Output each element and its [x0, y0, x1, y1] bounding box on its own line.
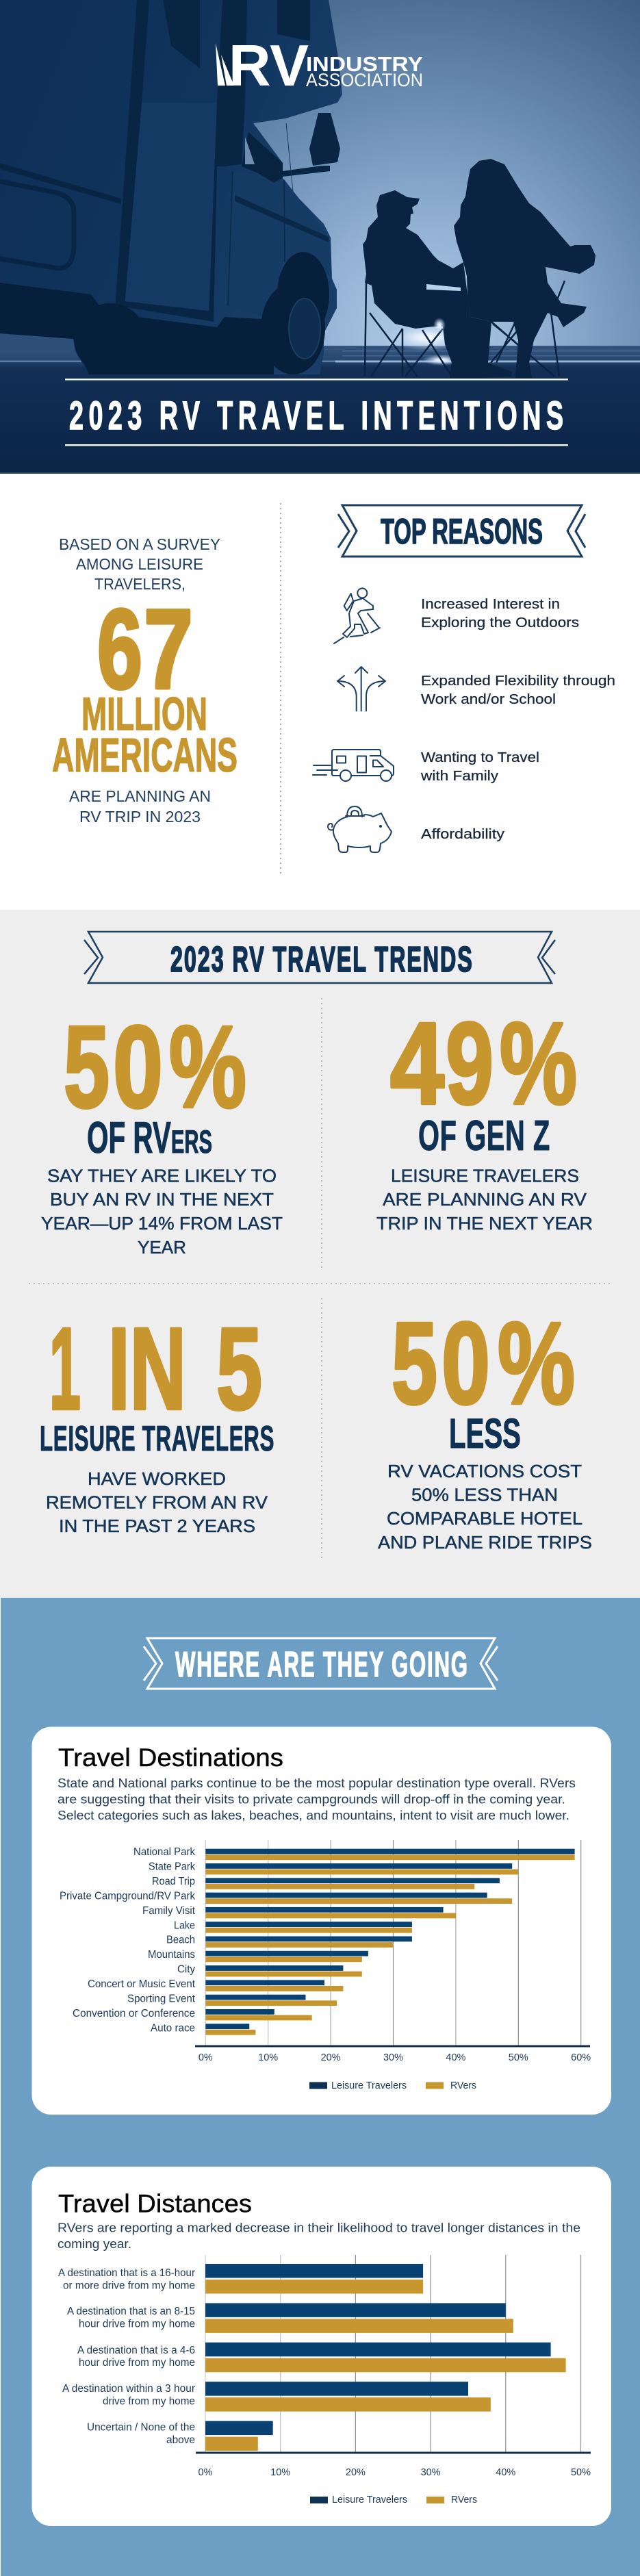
banner: travel trends: 2023 RV TRAVEL TRENDS — [170, 940, 472, 980]
icon: RV — [313, 750, 394, 781]
bar chart: travel distances: A destination that is a 4-6 — [77, 2345, 195, 2356]
big stat: 67 million Americans — [52, 586, 238, 782]
bar chart: travel distances: 40% — [496, 2467, 515, 2478]
card: travel destinations — [31, 1726, 611, 2115]
bar chart: travel distances: 20% — [346, 2467, 366, 2478]
bar chart: travel destinations — [60, 1840, 591, 2063]
reason: family: Wanting to Travel — [421, 750, 539, 765]
survey closing text: RV TRIP IN 2023 — [79, 808, 201, 826]
reason: flexibility: Work and/or School — [421, 692, 556, 707]
survey lead-in text: BASED ON A SURVEY — [59, 535, 220, 553]
bar chart: travel distances: 30% — [421, 2467, 441, 2478]
bar chart: travel distances: 10% — [270, 2467, 290, 2478]
bar chart: travel destinations: 60% — [571, 2052, 591, 2063]
reason: family: with Family — [420, 769, 498, 784]
icon: hiker — [334, 588, 380, 643]
stat: 1 in 5 leisure travelers: REMOTELY FROM AN RV — [46, 1492, 268, 1513]
stat: 50% of RVers: BUY AN RV IN THE NEXT — [50, 1189, 274, 1210]
legend: travel distances: Leisure Travelers — [332, 2494, 407, 2505]
bar chart: travel destinations: Private Campground/RV Park — [60, 1890, 195, 1902]
logo: RV Industry Association: INDUSTRY — [306, 52, 423, 76]
bar chart: travel destinations: National Park — [133, 1846, 195, 1858]
description: travel destinations: State and National parks continue to be the most popular destination type overall. RVers — [57, 1776, 576, 1790]
stat: 50% of RVers: 5 — [64, 1002, 110, 1132]
bar chart: travel destinations: Concert or Music Event — [88, 1978, 196, 1990]
survey lead-in text: AMONG LEISURE — [76, 555, 203, 573]
description: travel destinations: Select categories such as lakes, beaches, and mountains, intent to visit are much lower. — [57, 1808, 569, 1822]
survey lead-in text: TRAVELERS, — [94, 575, 185, 593]
stat: 50% less: % — [498, 1299, 575, 1429]
stat: 49% of Gen Z — [376, 999, 593, 1234]
reason: family — [420, 750, 539, 784]
stat: 1 in 5 leisure travelers: IN — [108, 1304, 186, 1434]
panel: 2023 RV travel trends — [0, 910, 640, 1598]
big stat: 67 million Americans: 7 — [144, 586, 193, 712]
legend: travel destinations: Leisure Travelers — [331, 2080, 407, 2091]
bar chart: travel destinations: 50% — [509, 2052, 528, 2063]
bar chart: travel destinations: Beach — [166, 1935, 195, 1946]
stat: 49% of Gen Z: % — [500, 999, 577, 1129]
legend: travel distances: RVers — [451, 2494, 477, 2505]
stat: 1 in 5 leisure travelers — [40, 1304, 274, 1536]
panel: survey and top reasons — [52, 503, 615, 875]
bar chart: travel distances: A destination within a 3 hour — [62, 2383, 195, 2395]
bar chart: travel destinations: State Park — [149, 1861, 195, 1873]
survey closing text: ARE PLANNING AN — [69, 787, 211, 805]
reason: flexibility — [421, 674, 615, 707]
bar chart: travel destinations: 10% — [258, 2052, 278, 2063]
bar chart: travel distances: A destination that is an 8-15 — [67, 2306, 195, 2317]
bar chart: travel distances: drive from my home — [103, 2396, 195, 2407]
stat: 50% of RVers: YEAR—UP 14% FROM LAST — [41, 1213, 283, 1234]
stat: 50% less: COMPARABLE HOTEL — [387, 1508, 583, 1529]
banner: where are they going: WHERE ARE THEY GOING — [175, 1645, 468, 1685]
big stat: 67 million Americans: 6 — [97, 586, 142, 712]
stat: 50% of RVers: YEAR — [138, 1237, 186, 1258]
bar chart: travel destinations: 40% — [446, 2052, 466, 2063]
bar chart: travel distances — [58, 2255, 591, 2478]
stat: 50% less: 5 — [392, 1299, 437, 1429]
banner: where are they going — [144, 1638, 498, 1689]
survey closing text — [69, 787, 211, 826]
description: travel distances: RVers are reporting a marked decrease in their likelihood to travel longer distances in the — [57, 2221, 580, 2234]
logo: RV Industry Association — [216, 34, 423, 99]
bar chart: travel destinations: 20% — [321, 2052, 341, 2063]
banner: top reasons — [338, 505, 585, 557]
stat: 50% less — [378, 1299, 592, 1553]
stat: 50% less: RV VACATIONS COST — [387, 1461, 582, 1481]
bar chart: travel destinations: Road Trip — [152, 1876, 195, 1887]
bar chart: travel destinations: Lake — [174, 1920, 195, 1931]
stat: 1 in 5 leisure travelers: 1 — [49, 1304, 81, 1434]
stat: 1 in 5 leisure travelers: LEISURE TRAVELERS — [40, 1419, 274, 1459]
bar chart: travel destinations: Sporting Event — [127, 1993, 196, 2004]
big stat: 67 million Americans: MILLION — [81, 688, 207, 740]
stat: 50% less: AND PLANE RIDE TRIPS — [378, 1532, 592, 1553]
stat: 1 in 5 leisure travelers: IN THE PAST 2 YEARS — [59, 1516, 255, 1536]
reason: flexibility: Expanded Flexibility through — [421, 674, 615, 689]
stat: 50% of RVers: % — [169, 1002, 246, 1132]
reason: affordability: Affordability — [421, 827, 504, 842]
reason: outdoors — [421, 597, 579, 630]
stat: 49% of Gen Z: LEISURE TRAVELERS — [391, 1165, 579, 1186]
bar chart: travel distances: hour drive from my home — [79, 2318, 195, 2330]
logo: RV Industry Association: ASSOCIATION — [306, 70, 423, 90]
stat: 50% of RVers — [41, 1002, 283, 1258]
stat: 50% of RVers: SAY THEY ARE LIKELY TO — [47, 1165, 277, 1186]
logo: RV Industry Association: RV — [229, 34, 309, 99]
bar chart: travel distances: Uncertain / None of the — [87, 2422, 195, 2433]
bar chart: travel destinations: Convention or Conference — [73, 2008, 195, 2019]
bar chart: travel destinations: 0% — [199, 2052, 213, 2063]
stat: 50% less: 0 — [441, 1299, 490, 1429]
icon: piggy bank — [328, 806, 392, 852]
stat: 50% of RVers: OF RVERS — [87, 1112, 212, 1162]
legend: travel distances — [310, 2494, 477, 2505]
stat: 49% of Gen Z: 4 — [390, 999, 444, 1129]
hero panel — [0, 0, 640, 474]
heading: travel distances: Travel Distances — [58, 2189, 252, 2218]
stat: 50% of RVers: 0 — [113, 1002, 163, 1132]
bar chart: travel distances: 50% — [571, 2467, 591, 2478]
panel: where are they going — [1, 1598, 640, 2576]
stat: 1 in 5 leisure travelers: 5 — [216, 1304, 262, 1434]
bar chart: travel distances: or more drive from my home — [63, 2280, 195, 2292]
stat: 50% less: LESS — [449, 1410, 521, 1457]
hero title with rules: 2023 RV TRAVEL INTENTIONS — [69, 394, 563, 438]
bar chart: travel destinations: City — [177, 1964, 195, 1976]
stat: 49% of Gen Z: OF GEN Z — [418, 1112, 550, 1160]
card: travel distances — [31, 2167, 611, 2526]
description: travel destinations — [57, 1776, 576, 1822]
bar chart: travel distances: 0% — [199, 2467, 213, 2478]
stat: 49% of Gen Z: TRIP IN THE NEXT YEAR — [376, 1213, 593, 1234]
banner: top reasons: TOP REASONS — [381, 512, 543, 552]
description: travel distances — [57, 2221, 580, 2251]
big stat: 67 million Americans: AMERICANS — [52, 728, 238, 782]
bar chart: travel destinations: Family Visit — [142, 1905, 196, 1917]
bar chart: travel distances: A destination that is a 16-hour — [58, 2267, 195, 2279]
description: travel destinations: are suggesting that their visits to private campgrounds will drop-off in the coming year. — [57, 1792, 565, 1806]
legend: travel destinations: RVers — [450, 2080, 476, 2091]
banner: travel trends — [84, 932, 555, 983]
hero photo: RV and couple at dusk — [0, 0, 640, 473]
stat: 49% of Gen Z: 9 — [446, 999, 494, 1129]
reason: outdoors: Increased Interest in — [421, 597, 560, 612]
stat: 50% less: 50% LESS THAN — [411, 1484, 558, 1505]
bar chart: travel distances: above — [166, 2434, 195, 2446]
bar chart: travel destinations: 30% — [383, 2052, 403, 2063]
stat: 1 in 5 leisure travelers: HAVE WORKED — [88, 1468, 226, 1489]
bar chart: travel destinations: Mountains — [148, 1949, 195, 1961]
legend: travel destinations — [309, 2080, 476, 2091]
stat: 49% of Gen Z: ARE PLANNING AN RV — [383, 1189, 587, 1210]
reason: outdoors: Exploring the Outdoors — [421, 615, 579, 630]
heading: travel destinations: Travel Destinations — [58, 1744, 283, 1772]
icon: diverging arrows — [337, 667, 385, 711]
survey lead-in text — [59, 535, 220, 593]
description: travel distances: coming year. — [57, 2236, 131, 2251]
bar chart: travel destinations: Auto race — [151, 2022, 195, 2034]
bar chart: travel distances: hour drive from my home — [79, 2357, 195, 2369]
